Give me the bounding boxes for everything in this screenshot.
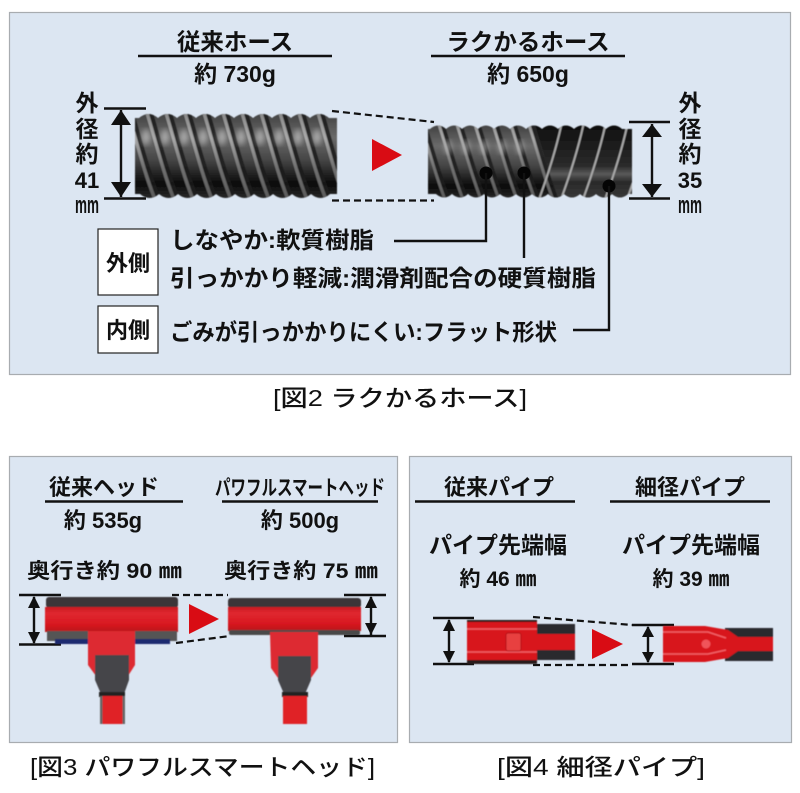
- text: flat shape: ごみが引っかかりにくい:フラット形状: [170, 319, 557, 345]
- box: inner side: [98, 306, 158, 353]
- image: conventional pipe: [467, 620, 575, 664]
- heading: light hose: 約 650g: [487, 61, 569, 87]
- arrow: red triangle: [592, 629, 623, 659]
- image: conventional head: [45, 597, 178, 724]
- heading: powerful smart head: パワフルスマートヘッド: [215, 477, 385, 500]
- heading: thin pipe: 細径パイプ: [635, 475, 745, 500]
- label: outer diameter 41mm: 約: [76, 141, 98, 167]
- box: outer side: 外側: [106, 251, 150, 276]
- image: thin pipe: [663, 626, 773, 662]
- heading: conventional hose: [138, 29, 332, 87]
- label: outer diameter 35mm: 35: [678, 168, 702, 193]
- label: outer diameter 35mm: mm: [678, 192, 702, 219]
- dashed guide lines: [533, 617, 632, 665]
- heading: powerful smart head: [215, 477, 385, 533]
- dimension arrow: 35mm: [629, 122, 670, 198]
- text: conventional pipe width: 約 46 ㎜: [459, 568, 537, 591]
- dashed guide lines: [172, 595, 230, 643]
- text: soft resin: しなやか:軟質樹脂: [170, 227, 374, 253]
- heading: light hose: ラクかるホース: [446, 29, 610, 55]
- caption: figure 4: [図4 細径パイプ]: [497, 754, 705, 780]
- dimension arrow: 39mm: [632, 625, 674, 664]
- dashed guide lines: [332, 111, 434, 200]
- dimension arrow: 90mm: [19, 595, 61, 644]
- heading: conventional head: 約 535g: [64, 508, 142, 533]
- image: conventional hose: [134, 113, 338, 199]
- label: depth 90mm: 奥行き約 90 ㎜: [27, 560, 182, 583]
- arrow: red triangle: [372, 139, 402, 171]
- label: outer diameter 41mm: 径: [76, 116, 98, 142]
- label: outer diameter 35mm: 径: [678, 116, 702, 142]
- heading: light hose: [431, 29, 625, 87]
- panel: hose comparison: [10, 12, 790, 374]
- label: outer diameter 41mm: [75, 90, 99, 219]
- text: conventional pipe width: パイプ先端幅: [429, 532, 567, 558]
- heading: conventional head: [45, 475, 183, 533]
- panel: pipe comparison: [410, 456, 792, 742]
- label: outer diameter 35mm: 外: [678, 90, 702, 116]
- caption: figure 2: [図2 ラクかるホース]: [273, 385, 527, 411]
- text: conventional pipe width: [429, 532, 567, 591]
- box: inner side: 内側: [106, 318, 150, 343]
- text: thin pipe width: パイプ先端幅: [622, 532, 760, 558]
- dimension arrow: 46mm: [433, 618, 474, 664]
- label: outer diameter 41mm: 41: [75, 168, 99, 193]
- label: outer diameter 35mm: [678, 90, 702, 219]
- heading: powerful smart head: 約 500g: [261, 508, 339, 533]
- dimension arrow: 75mm: [344, 595, 386, 636]
- heading: conventional head: 従来ヘッド: [49, 475, 159, 500]
- label: outer diameter 41mm: mm: [75, 192, 99, 219]
- image: light hose: [427, 124, 633, 198]
- text: thin pipe width: [622, 532, 760, 591]
- heading: conventional pipe: 従来パイプ: [444, 475, 554, 500]
- dimension arrow: 41mm: [104, 108, 146, 198]
- caption: figure 3: [図3 パワフルスマートヘッド]: [30, 754, 375, 780]
- label: depth 75mm: 奥行き約 75 ㎜: [224, 560, 378, 583]
- text: hard resin: 引っかかり軽減:潤滑剤配合の硬質樹脂: [170, 265, 596, 291]
- panel: head comparison: [10, 456, 398, 742]
- label: outer diameter 41mm: 外: [76, 90, 98, 116]
- image: smart head: [228, 598, 361, 724]
- text: thin pipe width: 約 39 ㎜: [652, 568, 730, 591]
- arrow: red triangle: [189, 604, 219, 634]
- label: outer diameter 35mm: 約: [678, 141, 702, 167]
- leader lines with dots: [394, 166, 616, 330]
- box: outer side: [98, 229, 158, 295]
- heading: conventional hose: 約 730g: [194, 61, 276, 87]
- heading: conventional hose: 従来ホース: [177, 29, 293, 55]
